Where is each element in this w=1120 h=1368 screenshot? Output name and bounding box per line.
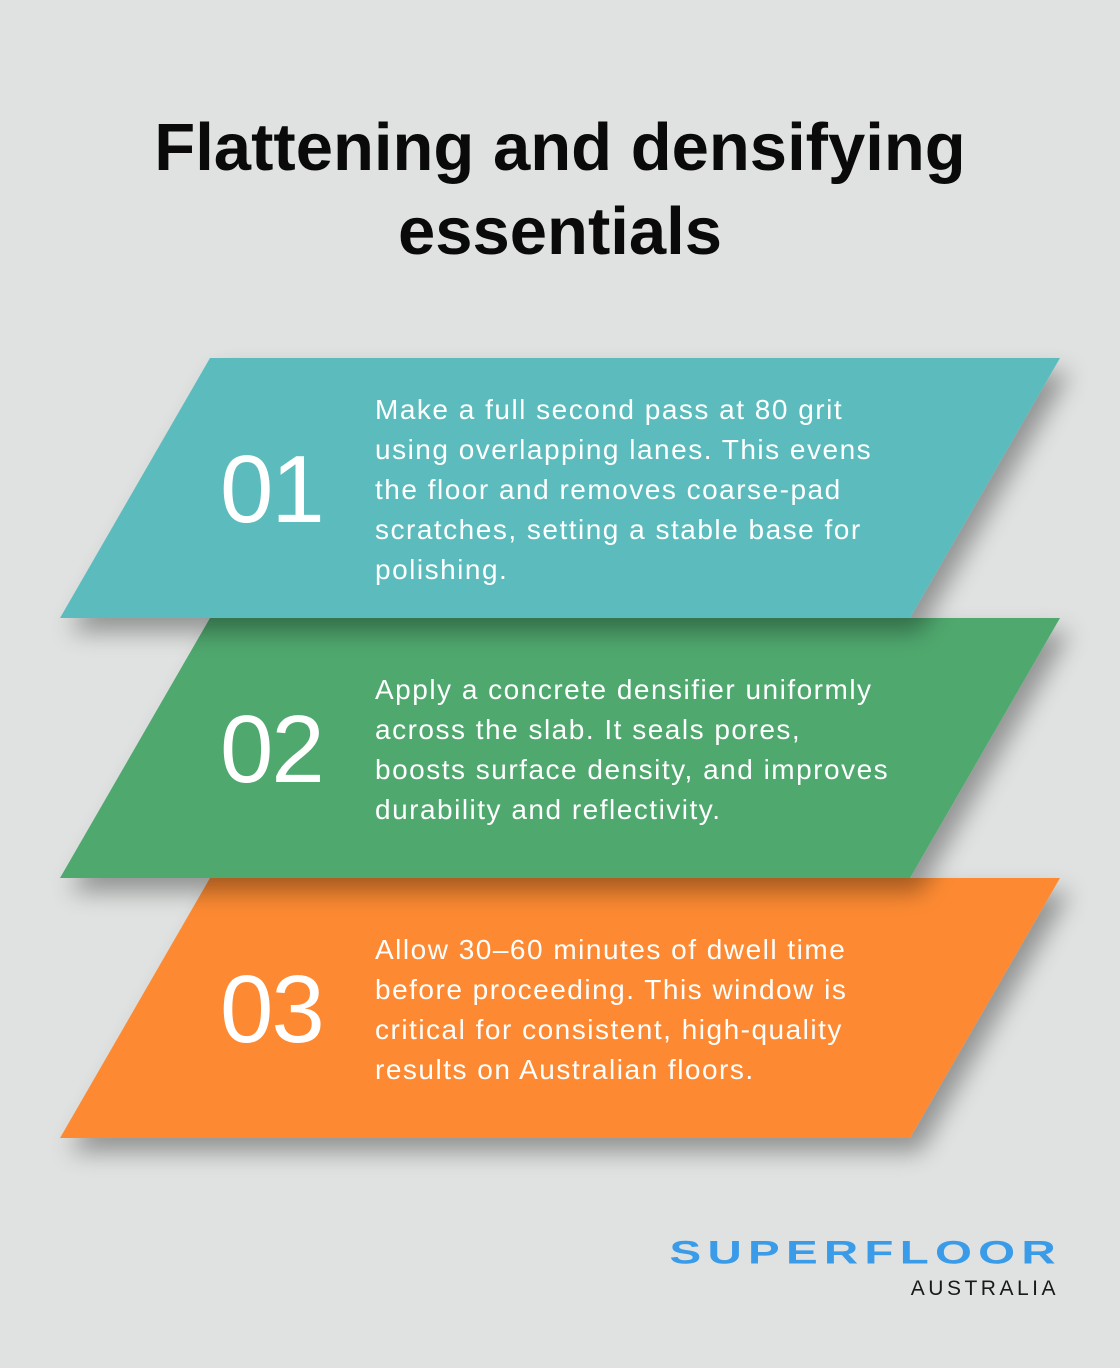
title: Flattening and densifying <box>154 110 966 185</box>
logo: SUPERFLOOR <box>670 1235 1062 1271</box>
step 2 text: Apply a concrete densifier uniformly across the slab. It seals pores, boosts surface density, and improves durability and reflectivity. <box>375 674 889 825</box>
step 2 number: 02 <box>220 696 323 803</box>
step 3 number: 03 <box>220 956 323 1063</box>
title <box>154 110 966 269</box>
logo: AUSTRALIA <box>911 1277 1059 1300</box>
band 3 <box>60 878 1060 1138</box>
title: essentials <box>398 194 722 269</box>
step 1 number: 01 <box>220 436 323 543</box>
step 1 text: Make a full second pass at 80 grit using overlapping lanes. This evens the floor and removes coarse-pad scratches, setting a stable base for polishing. <box>375 394 872 585</box>
band 2 <box>60 618 1060 878</box>
step 3 text: Allow 30–60 minutes of dwell time before proceeding. This window is critical for consistent, high-quality results on Australian floors. <box>375 934 847 1085</box>
logo <box>670 1235 1062 1300</box>
band 1 <box>60 358 1060 618</box>
